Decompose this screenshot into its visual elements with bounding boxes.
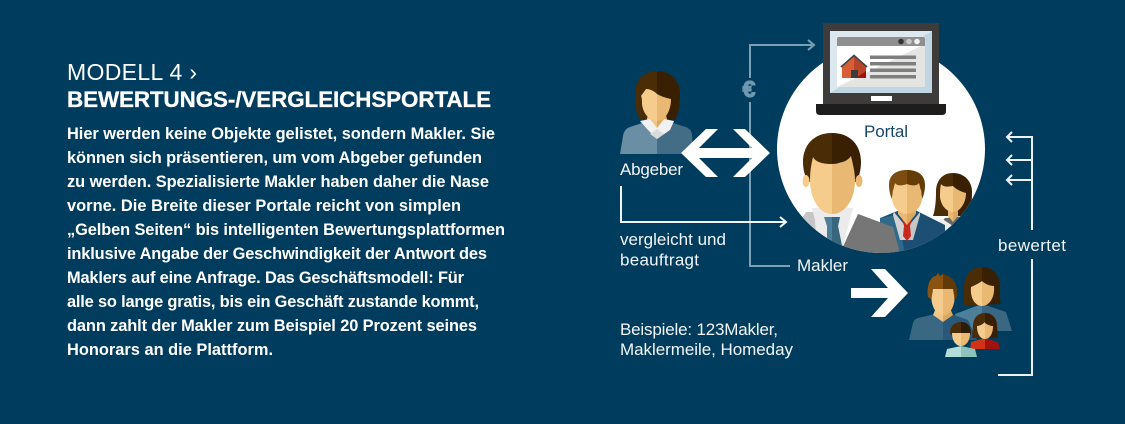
examples text [620, 320, 794, 359]
small male broker [880, 170, 945, 260]
label: Portal: Portal [864, 122, 908, 141]
white circle [777, 45, 985, 253]
arrow: to customers [851, 269, 908, 317]
double arrow [681, 129, 770, 177]
arrow: vergleicht und beauftragt [621, 186, 786, 227]
euro payment arrow [743, 40, 814, 266]
body text: Maklers auf eine Anfrage. Das Geschäftsmodell: Für [67, 269, 465, 287]
body text: zu werden. Spezialisierte Makler haben daher die Nase [67, 173, 489, 191]
title: BEWERTUNGS-/VERGLEICHSPORTALE [67, 87, 491, 112]
body text: dann zahlt der Makler zum Beispiel 20 Prozent seines [67, 317, 477, 335]
body text: „Gelben Seiten“ bis intelligenten Bewertungsplattformen [67, 221, 505, 239]
euro payment arrow: € [743, 76, 756, 102]
icon: family [909, 267, 1012, 357]
body text: Honorars an die Plattform. [67, 341, 273, 359]
examples text: Beispiele: 123Makler, [620, 320, 778, 339]
label: vergleicht und beauftragt: beauftragt [620, 250, 699, 270]
body text: inklusive Angabe der Geschwindigkeit der Antwort des [67, 245, 487, 263]
examples text: Maklermeile, Homeday [620, 340, 794, 359]
label: Abgeber: Abgeber [620, 160, 683, 179]
body text: können sich präsentieren, um vom Abgeber gefunden [67, 149, 482, 167]
icon: laptop portal [816, 23, 946, 115]
icon: brokers group in circle [802, 133, 972, 253]
mother [955, 267, 1012, 331]
label: bewertet: bewertet [998, 236, 1066, 255]
girl [970, 313, 1000, 349]
body text: vorne. Die Breite dieser Portale reicht von simplen [67, 197, 461, 215]
body text [67, 125, 505, 359]
title: MODELL 4 › [67, 59, 197, 85]
body text: alle so lange gratis, bis ein Geschäft zustande kommt, [67, 293, 479, 311]
bewertet bracket arrows [998, 132, 1032, 375]
label: Makler: Makler [797, 256, 848, 275]
title [67, 59, 491, 112]
body text: Hier werden keine Objekte gelistet, sondern Makler. Sie [67, 125, 495, 143]
label: vergleicht und beauftragt: vergleicht und [620, 230, 726, 249]
large male broker [802, 133, 900, 253]
icon: Abgeber woman [620, 71, 693, 154]
woman broker [926, 173, 972, 243]
father [909, 273, 977, 340]
label: vergleicht und beauftragt [620, 230, 726, 270]
boy [945, 322, 977, 357]
